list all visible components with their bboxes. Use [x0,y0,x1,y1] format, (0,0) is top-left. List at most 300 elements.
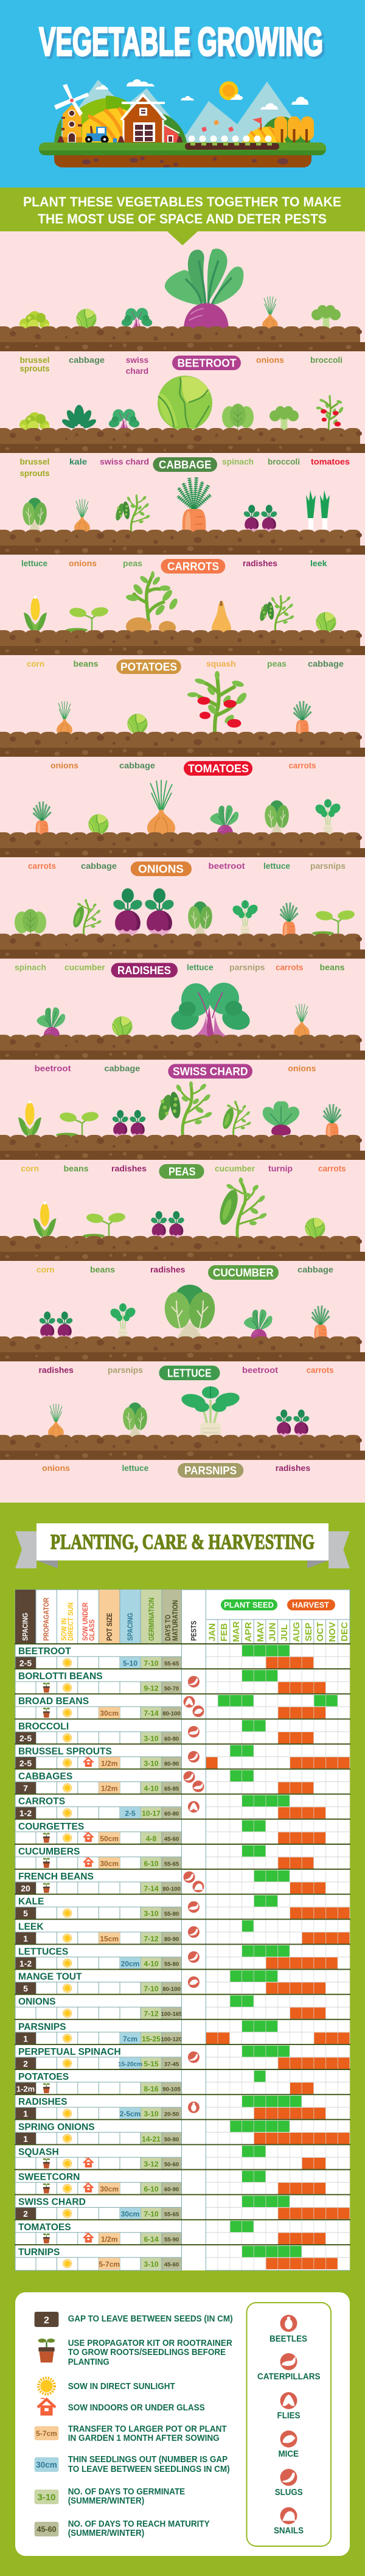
plants: onions row [33,780,341,836]
table row: broad beans [15,1694,350,1719]
table row: broad beans: BROAD BEANS [18,1696,89,1707]
labels [28,861,346,871]
banner: companion planting intro: PLANT THESE VEGETABLES TOGETHER TO MAKE [23,194,341,209]
legend: transfer key: 5-7cm [36,2429,57,2438]
labels: carrots [318,1163,346,1173]
legend: thin seedlings key: THIN SEEDLINGS OUT (NUMBER IS GAP [68,2455,228,2465]
table header: POT SIZE [105,1613,114,1641]
labels: onions [50,760,78,770]
table row: leek: 15cm [100,1934,119,1943]
pill: carrots [161,559,225,574]
labels [19,355,342,376]
table row: courgettes: 50cm [100,1834,119,1843]
legend: propagator key: PLANTING [68,2357,109,2367]
pill: lettuce [159,1366,220,1380]
pill: parsnips: PARSNIPS [184,1465,237,1477]
legend: transfer key [35,2424,227,2443]
table row: mange tout [15,1970,350,1995]
labels: cabbage [308,659,344,669]
labels: parsnips [310,861,346,871]
table row: broad beans: 30cm [100,1709,119,1718]
soil [0,1135,365,1160]
table row: kale: 5 [23,1909,28,1918]
table row: potatoes: 90-105 [162,2086,181,2093]
table row: squash: SQUASH [18,2147,59,2157]
legend: spacing key [35,2312,233,2327]
pest: slugs: SLUGS [275,2488,303,2497]
labels: sprouts [19,468,50,478]
labels: brussel [19,457,50,466]
table row: cabbages: 65-85 [164,1786,179,1792]
table row: onions: ONIONS [18,1997,56,2007]
month labels: JAN [207,1623,218,1641]
pill: potatoes: POTATOES [120,661,177,673]
windmill [54,84,89,142]
month labels: AUG [291,1622,302,1642]
plants: swiss chard row [36,983,310,1038]
table row: potatoes: 1-2m [16,2085,35,2093]
table row: carrots: 2-5 [125,1809,136,1818]
pill: cabbage: CABBAGE [159,459,212,471]
panel: legend [15,2292,350,2556]
plants: tomatoes row [57,671,311,735]
table row: swiss chard: 30cm [121,2210,139,2219]
table row: sweetcorn: SWEETCORN [18,2172,80,2182]
table row: broccoli: 60-80 [164,1736,179,1742]
table header: SPACING [21,1613,29,1641]
table row: perpetual spinach: 5-15 [144,2060,159,2068]
legend: sun key: SOW IN DIRECT SUNLIGHT [68,2382,175,2392]
legend: maturity key [35,2519,210,2538]
labels: peas [123,558,142,568]
table row: perpetual spinach [15,2045,350,2070]
labels: carrots [28,861,56,871]
table row: beetroot: 7-10 [144,1659,159,1668]
legend: sun key [38,2378,175,2394]
table row: french beans: 80-100 [162,1886,181,1893]
table row: cabbages: 7 [23,1783,28,1793]
table row: swiss chard: SWISS CHARD [18,2197,86,2208]
table row: spring onions: 14-21 [142,2135,161,2143]
soil [0,630,365,655]
labels: radishes [39,1365,74,1375]
banner: companion planting intro [0,188,365,245]
legend: spacing key: GAP TO LEAVE BETWEEN SEEDS (IN CM) [68,2314,233,2324]
table row: kale: 55-80 [164,1911,179,1918]
labels: cabbage [119,760,155,770]
labels: lettuce [122,1463,148,1473]
plants: beetroot row [19,248,341,331]
row: cucumber companions [0,1177,365,1280]
plants: radishes row [15,888,355,937]
legend: propagator key: USE PROPAGATOR KIT OR ROOTRAINER [68,2339,232,2348]
labels: chard [126,366,148,376]
table row: borlotti beans: 50-70 [164,1686,179,1693]
table row: turnips: 45-60 [164,2261,179,2268]
labels [21,558,327,568]
soil [0,326,365,351]
labels: onions [69,558,97,568]
table row: brussel sprouts [15,1745,350,1770]
table row: broccoli [15,1719,350,1745]
legend: thin seedlings key [35,2455,230,2474]
legend: indoors key: SOW INDOORS OR UNDER GLASS [68,2403,205,2413]
table row: tomatoes [15,2220,350,2245]
pill: parsnips [178,1463,243,1478]
legend: maturity key: NO. OF DAYS TO REACH MATURITY [68,2519,210,2529]
table row: carrots: CARROTS [18,1797,65,1807]
table row: radishes: 3-10 [144,2110,159,2118]
pill: tomatoes: TOMATOES [188,762,249,774]
soil [0,1435,365,1460]
table row: broad beans: 7-14 [144,1709,159,1718]
labels: swiss chard [100,457,149,466]
table row: swiss chard: 55-65 [164,2211,179,2218]
labels: squash [206,659,236,669]
table row: perpetual spinach: 2 [23,2058,28,2068]
plants: lettuce row [38,1285,330,1340]
pest: flies [277,2392,301,2421]
table row: borlotti beans [15,1669,350,1694]
tractor [85,126,109,144]
table row: squash: 3-12 [144,2160,159,2168]
table row: parsnips: PARSNIPS [18,2022,66,2032]
labels: corn [27,659,44,669]
legend: transfer key: TRANSFER TO LARGER POT OR PLANT [68,2424,227,2434]
pest: slugs [275,2469,303,2497]
table header: GERMINATION [147,1598,156,1641]
labels [19,457,350,478]
labels: turnip [268,1163,293,1173]
table row: cucumbers: 55-65 [164,1861,179,1868]
table row: lettuces: 20cm [121,1959,139,1968]
pill: onions [131,862,192,876]
table row: mange tout: 5 [23,1984,28,1993]
table row: turnips: 3-10 [144,2260,159,2269]
plants: peas row [18,1081,341,1139]
table row: radishes: 1 [23,2109,28,2119]
table row: courgettes: COURGETTES [18,1822,84,1832]
table row: cabbages: 1/2m [101,1785,117,1793]
labels: spinach [15,962,46,972]
table row: kale: 3-10 [144,1909,159,1918]
table header: SPACING [126,1613,134,1641]
month labels: MAR [231,1621,242,1642]
table row: mange tout: MANGE TOUT [18,1972,82,1982]
table row: cucumbers: 6-10 [144,1859,159,1868]
labels: cabbage [104,1063,141,1073]
soil [0,428,365,453]
pest: snails: SNAILS [274,2526,304,2536]
month labels: APR [243,1622,254,1642]
table row: carrots: 10-17 [142,1809,161,1818]
labels: broccoli [268,457,300,466]
soil [0,934,365,958]
table row: sweetcorn: 30cm [100,2185,119,2193]
table row: courgettes: 4-8 [146,1834,156,1843]
panel: planting care and harvesting background [0,1503,365,2576]
legend: germinate key: 3-10 [37,2493,56,2502]
table header: SOW UNDER [81,1602,89,1641]
table row: lettuces: 4-10 [144,1959,159,1968]
legend: propagator key: TO GROW ROOTS/SEEDLINGS BEFORE [68,2348,226,2357]
table row: tomatoes: 6-14 [144,2235,159,2244]
table header: MATURATION [171,1600,179,1641]
labels [42,1463,310,1473]
table row: lettuces: 55-80 [164,1961,179,1968]
legend: germinate key [35,2487,186,2506]
table row: perpetual spinach: 37-45 [164,2061,179,2068]
labels: beetroot [35,1063,71,1073]
table row: tomatoes: 55-90 [164,2236,179,2243]
calendar legend pills: PLANT SEED [224,1600,274,1610]
table row: borlotti beans: 9-12 [144,1684,159,1693]
table row: broad beans: 80-100 [162,1711,181,1718]
table row: swiss chard: 2 [23,2209,28,2219]
row: onions companions [0,780,365,876]
table row: parsnips: 15-25 [142,2035,161,2043]
table header: SOW IN [60,1618,68,1641]
month labels: OCT [315,1622,325,1641]
pill: swiss chard: SWISS CHARD [173,1065,248,1078]
table row: cucumbers: CUCUMBERS [18,1847,80,1857]
panel: pests key [247,2303,331,2546]
pest: caterpillars: CATERPILLARS [257,2372,321,2382]
table row: courgettes: 45-60 [164,1836,179,1842]
legend: indoors key [38,2398,205,2416]
plants: potatoes row [24,571,336,636]
table row: leek: LEEK [18,1921,44,1932]
table row: cabbages: 4-10 [144,1785,159,1793]
table row: brussel sprouts: BRUSSEL SPROUTS [18,1746,112,1757]
table row: spring onions: 1 [23,2134,28,2144]
labels: corn [36,1265,55,1274]
labels: swiss [126,355,148,365]
table row: french beans: FRENCH BEANS [18,1872,94,1882]
table row: broccoli: 3-10 [144,1734,159,1742]
table row: onions: 100-165 [161,2011,182,2018]
soil [0,832,365,857]
table row: radishes: RADISHES [18,2097,68,2107]
month labels: NOV [327,1622,338,1642]
labels: radishes [150,1265,186,1274]
table row: carrots: 60-80 [164,1811,179,1817]
row: tomatoes companions [0,671,365,776]
soil [0,732,365,757]
banner: companion planting intro: THE MOST USE OF SPACE AND DETER PESTS [38,211,327,226]
table row: onions [15,1995,350,2020]
labels: carrots [276,962,304,972]
labels: cucumber [64,962,105,972]
table row: borlotti beans: BORLOTTI BEANS [18,1671,103,1682]
soil [0,530,365,555]
soil [0,1236,365,1261]
table row: parsnips [15,2020,350,2045]
legend: thin seedlings key: TO LEAVE BETWEEN SEEDLINGS IN CM) [68,2465,230,2474]
labels: beans [90,1265,115,1274]
labels [15,962,345,972]
table row: tomatoes: TOMATOES [18,2222,71,2233]
pill: beetroot: BEETROOT [178,357,236,369]
table row: parsnips: 100-120 [161,2036,182,2043]
month labels: FEB [219,1623,229,1641]
labels: beans [320,962,345,972]
row: cabbage companions [0,376,365,478]
labels [36,1265,333,1274]
labels: radishes [276,1463,310,1473]
legend: maturity key: (SUMMER/WINTER) [68,2529,144,2538]
month labels: DEC [339,1622,350,1641]
table row: leek: 7-12 [144,1934,159,1943]
pest: beetles: BEETLES [269,2334,307,2344]
labels [21,1163,346,1173]
labels: beans [63,1163,89,1173]
pest: snails [274,2507,304,2536]
table row: carrots: 1-2 [19,1808,32,1818]
table row: cucumbers [15,1845,350,1870]
row: carrots companions [0,477,365,574]
pill: cucumber: CUCUMBER [213,1266,274,1279]
table row: squash: 50-60 [164,2161,179,2168]
plants: cabbage row [19,376,344,432]
soil [0,1336,365,1361]
labels: lettuce [187,962,214,972]
labels: tomatoes [311,457,350,466]
table row: french beans: 20 [21,1884,30,1893]
labels: radishes [111,1163,147,1173]
pill: peas: PEAS [169,1165,196,1177]
labels: brussel [19,355,50,365]
table row: kale [15,1895,350,1920]
plants: cucumber row [33,1177,325,1240]
plants: carrots row [21,477,330,534]
legend: germinate key: NO. OF DAYS TO GERMINATE [68,2487,186,2497]
labels: cabbage [81,861,117,871]
labels: beetroot [208,861,245,871]
pill: carrots: CARROTS [167,560,219,572]
table row: brussel sprouts: 1/2m [101,1760,117,1768]
labels: cucumber [215,1163,255,1173]
month labels: SEP [304,1623,314,1641]
labels [39,1365,334,1375]
table row: turnips: TURNIPS [18,2247,60,2258]
pill: onions: ONIONS [138,863,184,876]
labels: corn [21,1163,39,1173]
pill: peas [159,1164,204,1179]
calendar legend pills [221,1599,335,1610]
table row: spring onions: 50-80 [164,2136,179,2143]
table row: tomatoes: 1/2m [101,2235,117,2244]
row: swiss chard companions [0,983,365,1079]
pill: lettuce: LETTUCE [167,1367,212,1380]
table row: perpetual spinach: 15-20cm [118,2061,142,2068]
labels [27,659,344,669]
table row: swiss chard: 7-10 [144,2210,159,2219]
table row: lettuces: 1-2 [19,1959,32,1968]
table row: turnips [15,2245,350,2270]
table header: DAYS TO [164,1615,172,1641]
table row: sweetcorn [15,2170,350,2195]
legend: spacing key: 2 [44,2315,49,2326]
labels: cabbage [69,355,105,365]
legend: propagator key [38,2339,232,2367]
labels: peas [267,659,287,669]
table row: carrots [15,1795,350,1820]
table row: beetroot [15,1644,350,1669]
table rows [15,1644,350,2270]
table row: parsnips: 1 [23,2034,28,2043]
table row: french beans: 7-14 [144,1884,159,1893]
table row: swiss chard [15,2195,350,2220]
table row: potatoes: POTATOES [18,2072,69,2082]
pest: mice [279,2430,299,2459]
row: radishes companions [0,888,365,978]
table row: sweetcorn: 60-90 [164,2186,179,2193]
table row: broccoli: 2-5 [19,1733,32,1743]
labels: carrots [288,760,316,770]
table row: radishes: 20-50 [164,2111,179,2118]
labels [35,1063,316,1073]
table row: beetroot: 2-5 [19,1658,32,1668]
legend: thin seedlings key: 30cm [36,2460,57,2469]
table row: broccoli: BROCCOLI [18,1721,69,1732]
farm illustration [39,79,326,167]
plants: parsnips row [48,1386,310,1439]
labels: lettuce [21,558,47,568]
table row: mange tout: 80-100 [162,1986,181,1993]
month labels: JUL [279,1624,290,1641]
labels: carrots [307,1365,334,1375]
labels: kale [69,457,87,466]
table row: leek [15,1920,350,1945]
table row: brussel sprouts: 2-5 [19,1758,32,1768]
panel: companion planting background [0,231,365,1503]
table row: squash [15,2145,350,2171]
pest: flies: FLIES [277,2411,301,2421]
table header: PESTS [190,1621,198,1641]
table row: radishes: 2-5cm [120,2110,141,2118]
table row: potatoes: 8-16 [144,2085,159,2093]
table row: brussel sprouts: 80-90 [164,1761,179,1767]
table row: leek: 1 [23,1934,28,1943]
table row: onions: 7-12 [144,2010,159,2018]
legend: transfer key: IN GARDEN 1 MONTH AFTER SOWING [68,2434,220,2443]
pest: beetles [269,2315,307,2344]
panel: sky header [0,0,365,188]
table row: lettuces: LETTUCES [18,1946,68,1957]
table row: french beans [15,1870,350,1895]
labels: beans [73,659,99,669]
table row: beetroot: BEETROOT [18,1646,71,1657]
table row: beetroot: 55-65 [164,1661,179,1667]
table header: PROPAGATOR [42,1598,50,1641]
table row: brussel sprouts: 3-10 [144,1760,159,1768]
table row: spring onions: SPRING ONIONS [18,2122,95,2132]
pest: caterpillars [257,2353,321,2382]
legend: germinate key: (SUMMER/WINTER) [68,2496,144,2506]
labels: beetroot [242,1365,278,1375]
labels: spinach [222,457,254,466]
calendar legend pills: HARVEST [292,1600,329,1610]
legend: maturity key: 45-60 [37,2525,57,2534]
row: parsnips companions [0,1386,365,1478]
month labels [207,1621,350,1642]
labels: sprouts [19,363,50,373]
clouds [96,79,308,110]
labels: broccoli [310,355,342,365]
table row: kale: KALE [18,1897,44,1907]
table header: GLASS [88,1620,96,1641]
